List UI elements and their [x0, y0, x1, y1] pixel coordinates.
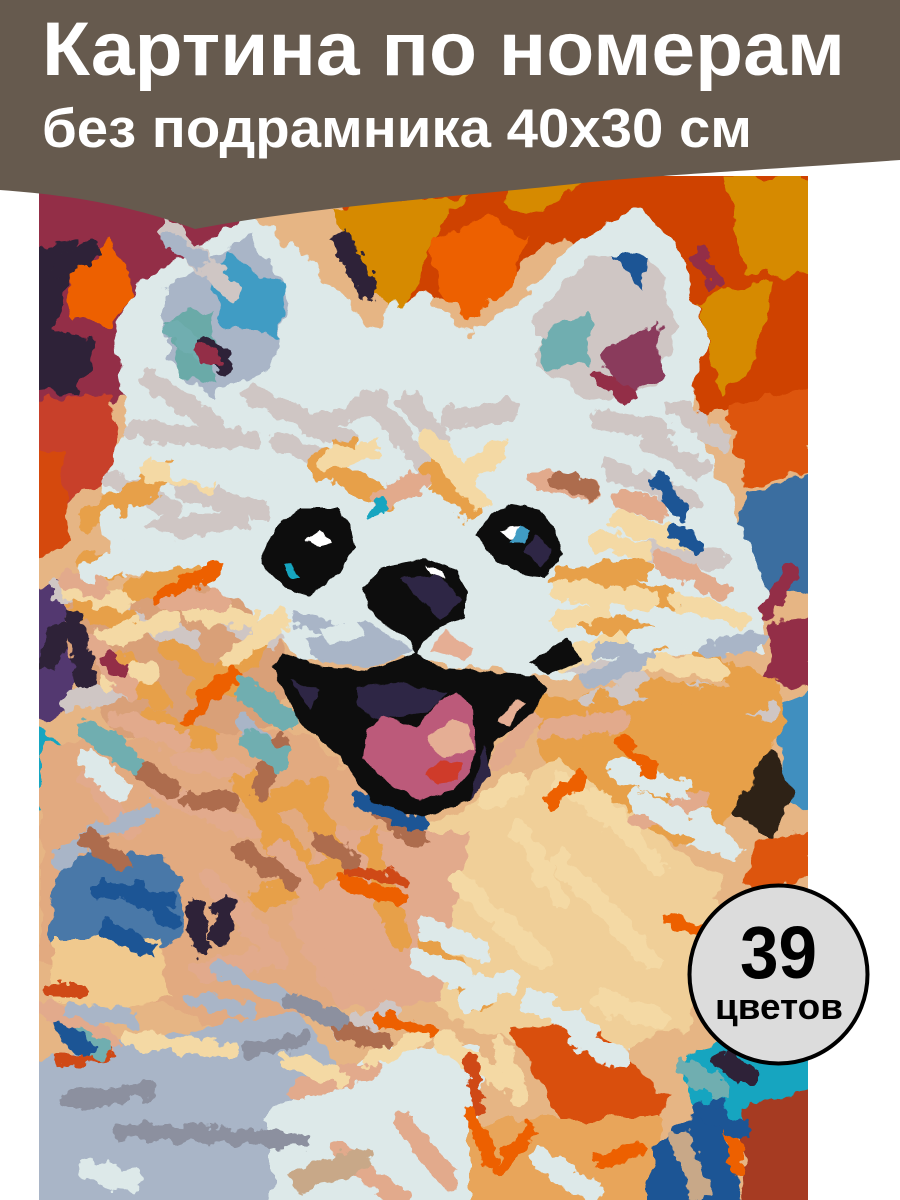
- left eye highlight: [306, 530, 332, 547]
- badge number: 39: [740, 911, 817, 994]
- right eye highlight: [500, 526, 520, 540]
- nose highlight: [425, 565, 445, 578]
- banner shape: [0, 0, 900, 229]
- subtitle: без подрамника 40х30 см: [42, 97, 752, 159]
- left eye blue glint: [285, 563, 300, 578]
- nose sheen: [400, 575, 462, 620]
- badge: 39 colours: [690, 886, 868, 1064]
- lip highlight: [497, 700, 525, 725]
- muzzle shading: [305, 620, 415, 668]
- right eye: [475, 503, 563, 578]
- tongue red patch: [425, 760, 462, 783]
- badge label: цветов: [715, 986, 843, 1027]
- fur strokes: [50, 230, 790, 1200]
- tongue: [363, 693, 475, 800]
- dog face: [260, 503, 583, 817]
- nose: [363, 558, 468, 657]
- white dog head and ears: [100, 205, 770, 680]
- header banner: [0, 0, 900, 229]
- painting: pomeranian dog: [30, 170, 820, 1200]
- tongue highlight: [427, 720, 473, 757]
- right eye blue glint: [510, 526, 530, 543]
- title: Картина по номерам: [42, 7, 845, 92]
- mouth: [272, 653, 547, 817]
- right eye shading: [525, 535, 552, 568]
- whisker patch: [530, 637, 583, 675]
- left eye: [260, 508, 355, 596]
- background colour areas: [30, 170, 820, 1200]
- mouth interior shadow: [290, 680, 490, 800]
